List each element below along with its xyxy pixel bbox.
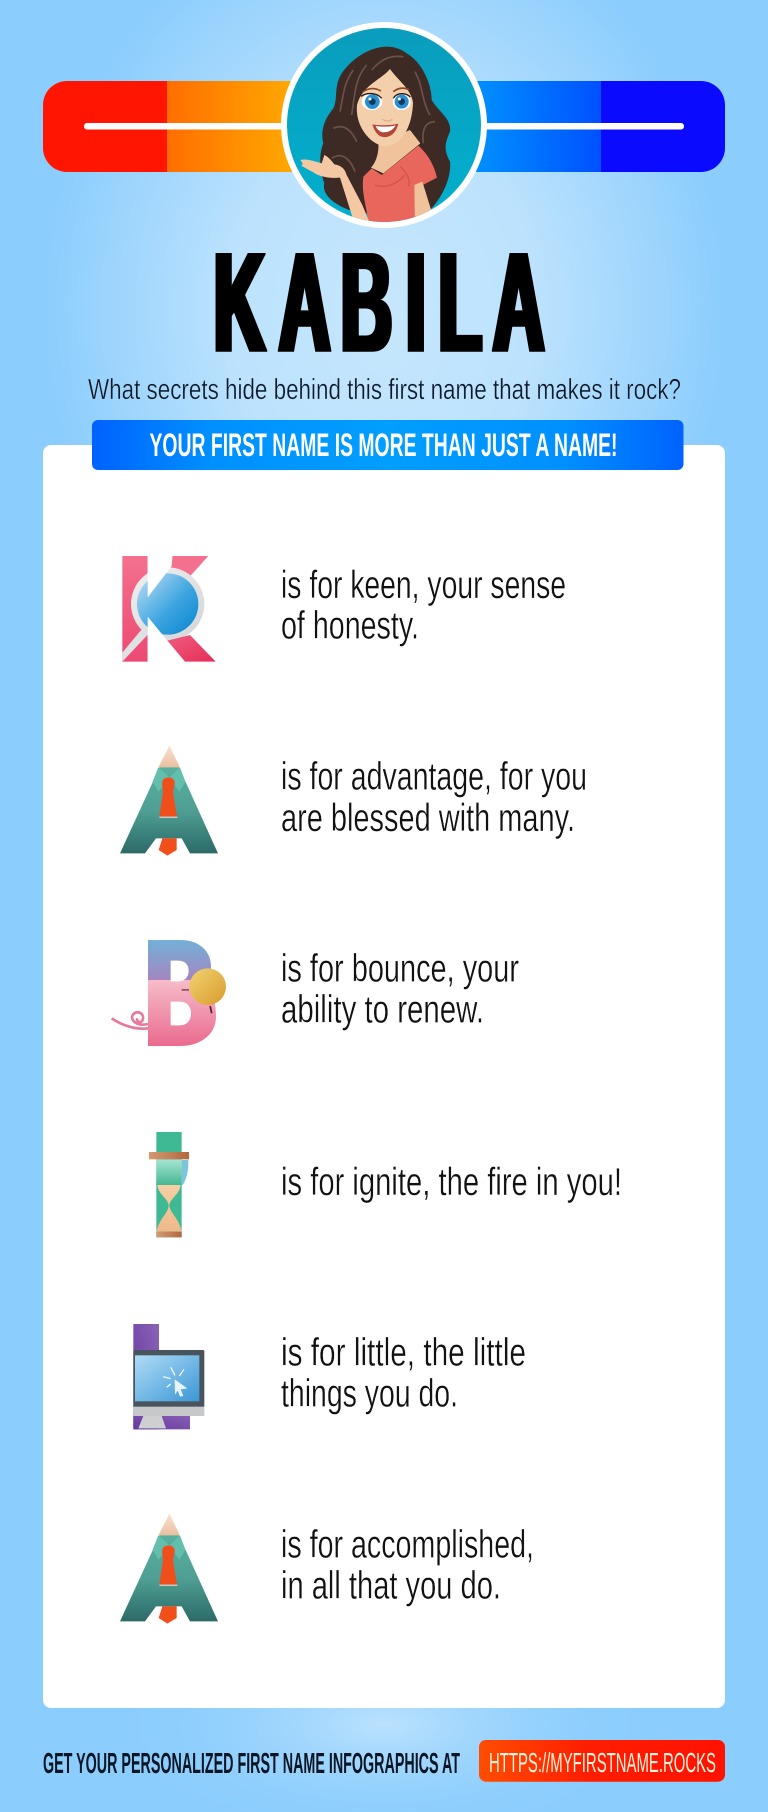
icon: letter A with tie (last) bbox=[120, 1514, 218, 1624]
text: B bbox=[281, 948, 519, 1032]
text: A accomplished bbox=[281, 1524, 534, 1608]
text: K: of honesty. bbox=[281, 604, 419, 648]
header ribbon bar bbox=[43, 81, 725, 172]
text: A accomplished: is for accomplished, bbox=[281, 1524, 534, 1566]
text: A accomplished: in all that you do. bbox=[281, 1564, 501, 1608]
text: B: ability to renew. bbox=[281, 988, 484, 1032]
icon: letter I hourglass bbox=[149, 1132, 189, 1237]
text: L: is for little, the little bbox=[281, 1332, 526, 1374]
footer url button bbox=[479, 1740, 725, 1782]
ribbon white line bbox=[84, 123, 684, 130]
content panel bbox=[43, 445, 725, 1708]
text: K: is for keen, your sense bbox=[281, 564, 566, 607]
title: KABILA bbox=[214, 222, 544, 382]
text: L: things you do. bbox=[281, 1372, 458, 1416]
text: I: is for ignite, the fire in you! bbox=[281, 1161, 622, 1204]
icon: letter A with tie bbox=[120, 746, 218, 856]
text: A advantage: are blessed with many. bbox=[281, 797, 575, 840]
text: A advantage bbox=[281, 756, 587, 840]
text: K bbox=[281, 564, 566, 648]
text: A advantage: is for advantage, for you bbox=[281, 756, 587, 798]
icon: letter K with magnifying glass bbox=[122, 553, 216, 663]
icon: letter B piggy bank bbox=[112, 940, 226, 1046]
avatar portrait bbox=[281, 22, 487, 228]
text: B: is for bounce, your bbox=[281, 948, 519, 990]
icon: letter L computer monitor bbox=[133, 1324, 204, 1429]
text: L bbox=[281, 1332, 526, 1416]
banner bbox=[92, 420, 684, 470]
